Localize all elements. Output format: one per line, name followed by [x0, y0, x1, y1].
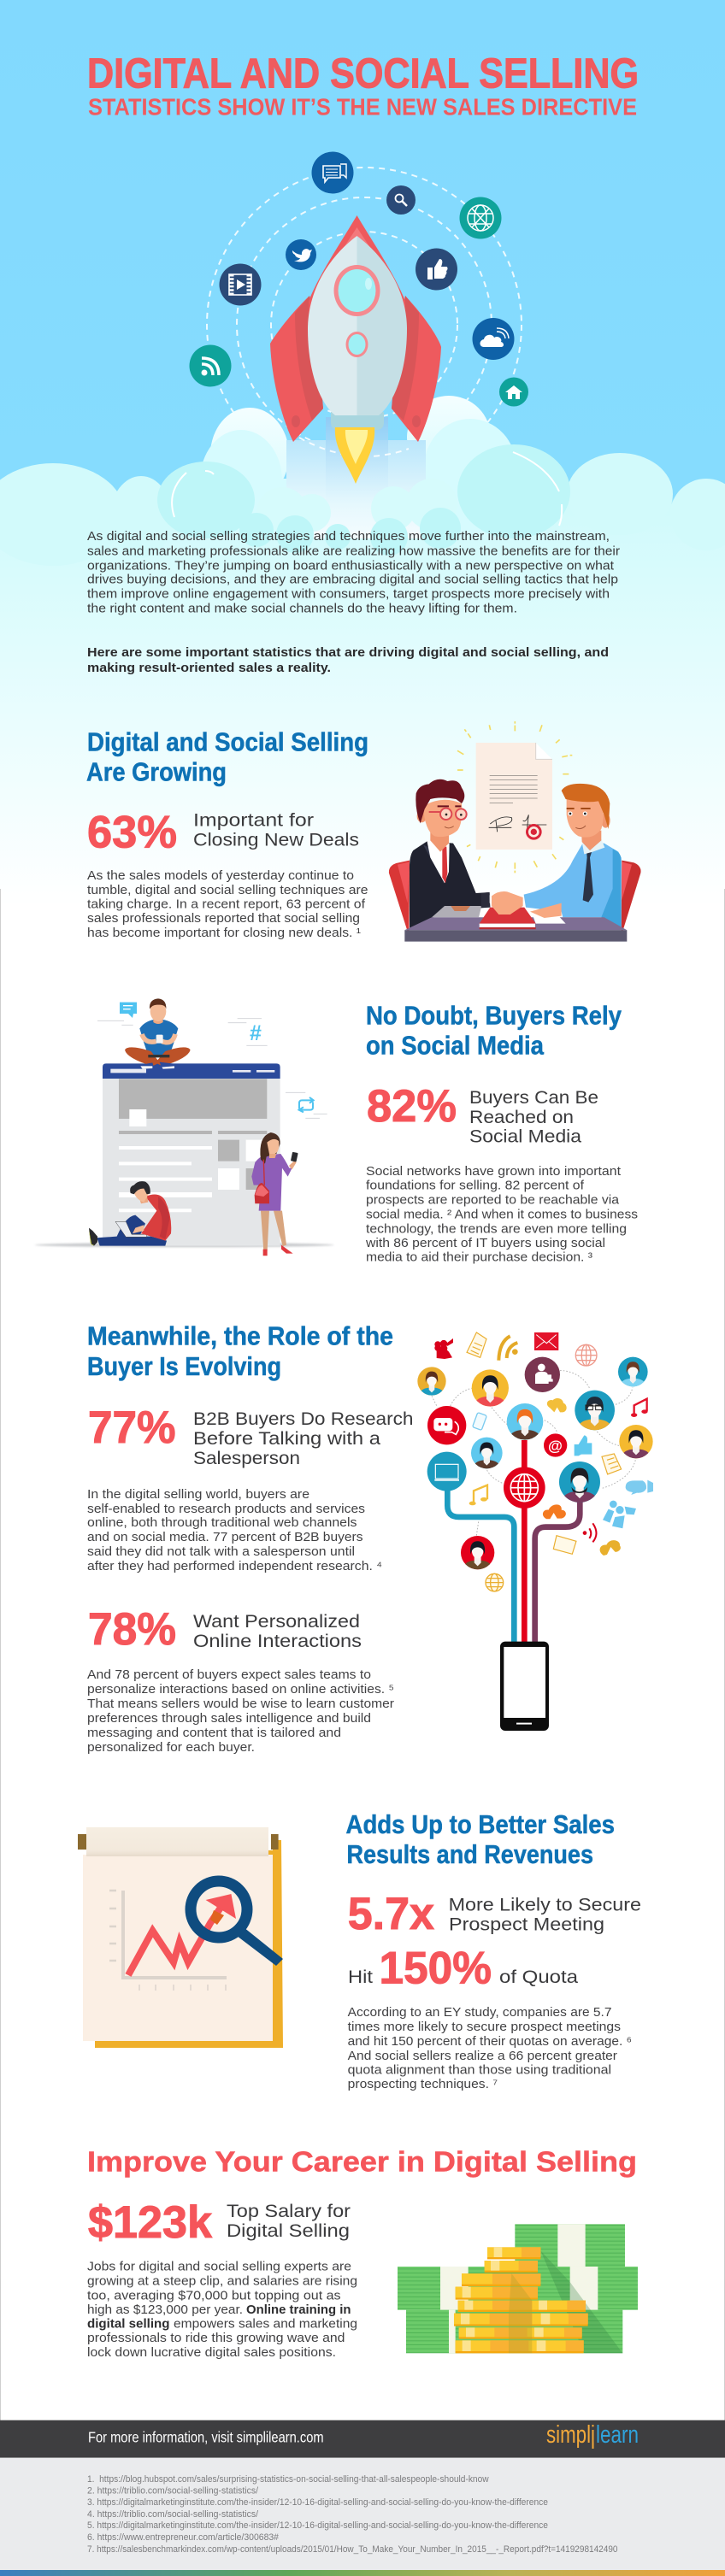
stat 150%: Hit [348, 1967, 373, 1987]
people avatars [417, 1357, 653, 1571]
section 2 body: with 86 percent of IT buyers using social [365, 1237, 605, 1250]
icon: thumbs up [575, 1435, 592, 1456]
left man [410, 779, 490, 929]
coin faces [454, 2247, 588, 2351]
coin shadow stripe [509, 2273, 532, 2353]
standing woman [251, 1132, 298, 1256]
intro text: drives buying decisions, and they are embracing digital and social selling tactics that help [87, 573, 618, 586]
illustration: social media tree growing from phone [417, 1332, 653, 1731]
section 2 body: prospects are reported to be reachable via [366, 1193, 620, 1207]
magnifier [191, 1881, 283, 1966]
coin edges [454, 2247, 588, 2353]
icon: globe [504, 1467, 545, 1509]
section 2 body: media to aid their purchase decision. ³ [366, 1250, 592, 1264]
pale cloud puffs [0, 463, 125, 566]
stat 77% body: online, both through traditional web channels [87, 1516, 357, 1530]
stat 77%: B2B Buyers Do Research [193, 1409, 414, 1429]
section 5 heading: Improve Your Career in Digital Selling [87, 2146, 637, 2178]
simplilearn logo: learn [596, 2421, 639, 2449]
section 2 heading: on Social Media [366, 1030, 545, 1060]
references panel: 7. https://salesbenchmarkindex.com/wp-content/uploads/2015/01/How_To_Make_Your_Number_In_2015__-_Report.pdf?t=1419298142490 [87, 2544, 618, 2555]
rocket body [308, 236, 357, 415]
icon: team [434, 1338, 453, 1359]
icon: chat bubbles [626, 1480, 653, 1495]
stat 77% body: said they did not talk with a salesperson until [87, 1545, 355, 1559]
intro text: As digital and social selling strategies and techniques move further into the mainstream, [87, 530, 610, 544]
icon: mail [534, 1332, 558, 1350]
stat 82%: 82% [367, 1081, 457, 1132]
section 1 heading [86, 727, 368, 786]
rocket [270, 215, 441, 538]
seated person with laptop [89, 1181, 171, 1246]
orbit rings [207, 168, 522, 482]
stat 5.7x: 5.7x [348, 1889, 435, 1939]
stat 78% body: And 78 percent of buyers expect sales teams to [87, 1668, 371, 1682]
stat 150% [348, 1944, 578, 1994]
section 2 body: Social networks have grown into important [366, 1165, 621, 1179]
nozzle [331, 412, 384, 430]
table [404, 917, 627, 930]
speech bubble [120, 1003, 137, 1018]
simplilearn logo [546, 2421, 639, 2449]
stat 63%: Important for [193, 810, 314, 831]
section 4 heading: Adds Up to Better Sales [345, 1809, 615, 1839]
section 5 body: growing at a steep clip, and salaries are rising [87, 2275, 357, 2289]
ground shadow [35, 1243, 334, 1247]
stat 77%: Before Talking with a [193, 1428, 380, 1449]
coin stacks [454, 2247, 588, 2353]
icon: document [467, 1332, 486, 1357]
section 5 body: Jobs for digital and social selling experts are [87, 2261, 351, 2274]
illustration: chart on scroll with magnifier [78, 1827, 283, 2048]
references panel [0, 2458, 725, 2571]
section 5 body: too, averaging $70,000 but topping out as [87, 2290, 341, 2303]
section 1 body: has become important for closing new deals. ¹ [87, 926, 361, 940]
section 2 body: technology, the trends are even more telling [366, 1222, 627, 1236]
right hand on table [530, 903, 562, 918]
stat 63% [87, 807, 359, 858]
stat 150%: of Quota [499, 1967, 578, 1987]
icon: laptop [427, 1452, 467, 1491]
intro text: sales and marketing professionals alike are realizing how massive the benefits are for their [87, 544, 620, 558]
illustration: money and coins [398, 2224, 638, 2353]
rainbow strip [0, 2570, 725, 2576]
intro text [87, 530, 620, 615]
section 4 body [348, 2006, 632, 2091]
icon: document [602, 1454, 622, 1474]
section 4 body: And social sellers realize a 66 percent greater [348, 2050, 617, 2063]
stat 77%: Salesperson [193, 1448, 300, 1468]
saturated cloud puffs [157, 462, 255, 538]
stat 78% body: preferences through sales intelligence and build [87, 1712, 371, 1726]
contract [476, 743, 552, 850]
icon: home [499, 378, 528, 407]
stat 5.7x [348, 1889, 641, 1939]
references panel: 2. https://triblio.com/social-selling-statistics/ [87, 2486, 258, 2497]
big porthole [333, 265, 380, 316]
back clouds [200, 396, 516, 538]
right fin [392, 296, 441, 442]
section 4 body: and hit 150 percent of their quotas on average. ⁶ [348, 2035, 632, 2049]
section 1 heading: Digital and Social Selling [87, 727, 368, 757]
intro text: them improve online engagement with consumers, target prospects more precisely with [87, 587, 610, 601]
stat $123k: Top Salary for [227, 2201, 351, 2221]
section 3 heading: Meanwhile, the Role of the [87, 1321, 393, 1351]
flame [335, 427, 374, 484]
icon: at sign: @ [548, 1438, 563, 1455]
icon: video [219, 263, 262, 306]
section 2 body: foundations for selling. 82 percent of [366, 1179, 585, 1193]
sparkle rays [457, 721, 572, 873]
icon: chat [311, 152, 354, 193]
stat 78% body: personalize interactions based on online activities. ⁵ [87, 1683, 394, 1697]
dotted links [432, 1370, 635, 1536]
section 5 body: empowers sales and marketing [174, 2318, 357, 2332]
stat 5.7x: More Likely to Secure [449, 1895, 641, 1915]
bank notes [398, 2224, 638, 2353]
section 5 body: Online training in [246, 2303, 351, 2317]
section 1 body [87, 869, 368, 940]
stat 77%: 77% [88, 1403, 176, 1453]
stat 78% body: messaging and content that is tailored and [87, 1726, 341, 1740]
references panel: 6. https://www.entrepreneur.com/article/300683# [87, 2532, 279, 2543]
chairs [389, 861, 641, 936]
section 5 body: digital selling [87, 2318, 169, 2332]
section 4 heading [345, 1809, 615, 1869]
front clouds [0, 444, 725, 566]
section 2 heading [366, 1000, 622, 1060]
illustration: people on social page [35, 998, 334, 1256]
rising arrow [128, 1894, 236, 1975]
section 1 heading: Are Growing [86, 756, 227, 786]
tree branches [447, 1440, 580, 1643]
title: STATISTICS SHOW IT’S THE NEW SALES DIRECTIVE [88, 94, 637, 121]
stat 150%: 150% [380, 1944, 492, 1994]
coin shade [490, 2247, 588, 2351]
stat 78%: Online Interactions [193, 1631, 362, 1651]
lower orbit arc [299, 438, 409, 456]
section 3 heading: Buyer Is Evolving [87, 1351, 281, 1381]
chart axes [121, 1891, 227, 1979]
icon: phone outline [473, 1413, 486, 1430]
icon: wifi cloud [472, 318, 515, 360]
stat 82%: Buyers Can Be [469, 1087, 598, 1108]
section 4 body: prospecting techniques. ⁷ [348, 2078, 498, 2091]
icon: rss [190, 345, 231, 386]
phone [500, 1642, 549, 1731]
dash accents [97, 1019, 327, 1118]
stat 77% body: after they had performed independent research. ⁴ [87, 1560, 382, 1573]
stat 77% body: and on social media. 77 percent of B2B buyers [87, 1531, 362, 1544]
section 4 body: According to an EY study, companies are 5.7 [348, 2006, 612, 2020]
references panel: 3. https://digitalmarketinginstitute.com/the-insider/12-10-16-digital-selling-and-social-selling-do-you-know-the-difference [87, 2497, 548, 2508]
stat 78% body [87, 1668, 394, 1755]
icon: cloud upload [547, 1398, 567, 1412]
icon: music note [631, 1399, 648, 1417]
red book [480, 908, 566, 929]
section 2 body [365, 1165, 638, 1264]
stat 63%: Closing New Deals [193, 829, 359, 850]
section 1 body: tumble, digital and social selling techniques are [87, 884, 368, 897]
rocket exhaust [326, 417, 388, 511]
footer call to action: For more information, visit simplilearn.com [88, 2429, 324, 2446]
web page [103, 1063, 280, 1246]
stat 5.7x: Prospect Meeting [449, 1914, 604, 1935]
stat 78% [88, 1604, 362, 1655]
cloud highlights [172, 452, 562, 526]
stat $123k: $123k [88, 2197, 213, 2248]
stat 77% body [87, 1488, 382, 1573]
icon: wifi [498, 1336, 518, 1361]
footer bar [0, 2420, 725, 2458]
left fin [270, 296, 323, 442]
stat 78% body: personalized for each buyer. [87, 1741, 255, 1755]
icon: at sign [544, 1433, 567, 1457]
section 5 body: high as $123,000 per year. [87, 2303, 243, 2317]
small icons [434, 1332, 653, 1591]
stat 77% body: In the digital selling world, buyers are [87, 1488, 309, 1502]
small porthole [345, 332, 368, 357]
stat $123k: Digital Selling [227, 2220, 350, 2241]
section 5 body: professionals to ride this growing wave and [87, 2332, 345, 2345]
hashtag: # [250, 1021, 262, 1045]
intro bold statement: making result-oriented sales a reality. [87, 662, 331, 675]
retweet icon [299, 1097, 314, 1112]
coin highlights [461, 2247, 550, 2351]
stat $123k [88, 2197, 351, 2248]
section 5 body: lock down lucrative digital sales positions. [87, 2346, 336, 2360]
icon: signal [583, 1523, 596, 1542]
icon: twitter [286, 239, 316, 270]
intro bold statement: Here are some important statistics that are driving digital and social selling, and [87, 646, 609, 660]
icon: cloud upload [600, 1540, 621, 1556]
stat 82%: Social Media [469, 1126, 581, 1147]
icon: people [603, 1501, 636, 1528]
simplilearn logo: simpli [546, 2421, 595, 2449]
illustration: handshake and contract [389, 721, 641, 942]
nose cone [309, 215, 405, 342]
section 5 body [87, 2261, 357, 2360]
icon: thumbs up [416, 248, 457, 291]
title: DIGITAL AND SOCIAL SELLING [87, 51, 639, 97]
icon: wire globe [575, 1344, 597, 1366]
stat 82% [367, 1081, 598, 1147]
stat 78%: Want Personalized [193, 1611, 360, 1632]
stat 82%: Reached on [469, 1107, 574, 1127]
section 1 body: As the sales models of yesterday continue to [87, 869, 354, 883]
section 4 body: times more likely to secure prospect meetings [348, 2020, 621, 2034]
stat 63%: 63% [87, 807, 177, 858]
references panel: 4. https://triblio.com/social-selling-statistics/ [87, 2509, 258, 2520]
stat 77% [88, 1403, 414, 1468]
icon: music note [469, 1485, 487, 1505]
person on top [125, 998, 191, 1069]
stat 77% body: self-enabled to research products and services [87, 1503, 365, 1516]
stat 78%: 78% [88, 1604, 176, 1655]
icon: add user [525, 1357, 560, 1392]
icon: red chat [427, 1406, 466, 1444]
right man [524, 784, 622, 929]
section 4 heading: Results and Revenues [347, 1839, 593, 1869]
icon: search [386, 185, 416, 215]
section 2 heading: No Doubt, Buyers Rely [366, 1000, 622, 1030]
clasped hands [481, 891, 523, 915]
intro text: organizations. They’re jumping on board enthusiastically with a new perspective on what [87, 559, 614, 573]
icon: network globe [460, 197, 501, 239]
references panel: 1. https://blog.hubspot.com/sales/surprising-statistics-on-social-selling-that-all-salespeople-should-know [87, 2474, 489, 2485]
section 1 body: sales professionals reported that social selling [87, 912, 360, 926]
intro text: the right content and make social channels do the heavy lifting for them. [87, 602, 517, 615]
section 2 body: social media. ² And when it comes to business [366, 1208, 638, 1221]
section 3 heading [87, 1321, 393, 1381]
references panel: 5. https://digitalmarketinginstitute.com/the-insider/12-10-16-digital-selling-and-social-selling-do-you-know-the-difference [87, 2520, 548, 2531]
section 4 body: quota alignment than those using traditional [348, 2064, 611, 2078]
section 1 body: taking charge. In a recent report, 63 percent of [87, 897, 366, 911]
icon: yellow globe [486, 1573, 504, 1591]
intro bold statement [87, 646, 609, 675]
icon: laptop outline [553, 1536, 576, 1554]
stat 78% body: That means sellers would be wise to learn customer [87, 1697, 394, 1711]
title [87, 51, 639, 121]
icon: cloud upload [543, 1504, 566, 1519]
smoke column [286, 440, 426, 538]
